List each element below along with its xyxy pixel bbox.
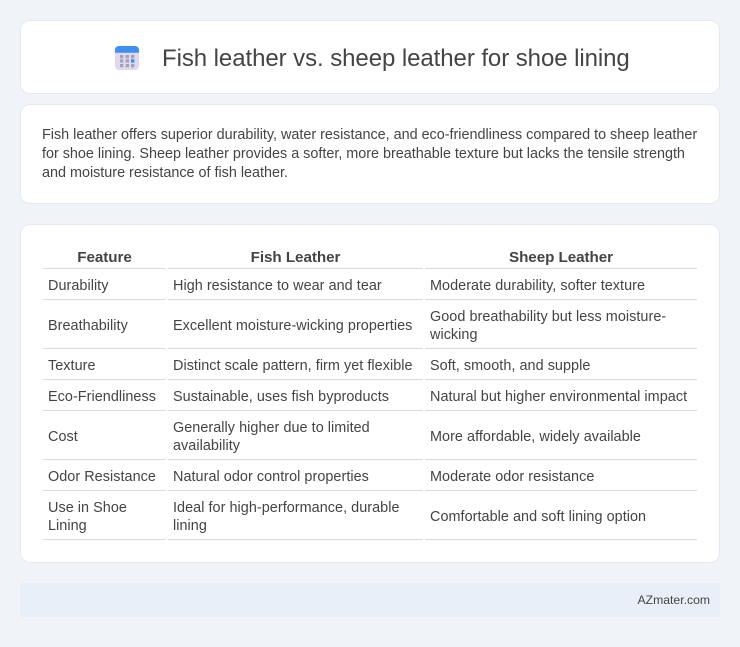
comparison table: Distinct scale pattern, firm yet flexible [173,358,413,374]
comparison table: Lining [48,518,87,534]
comparison table: Soft, smooth, and supple [430,358,590,374]
comparison table: lining [173,518,207,534]
intro text [42,127,697,181]
icon: calendar [115,46,139,70]
comparison table: Ideal for high-performance, durable [173,500,400,516]
comparison table: Natural but higher environmental impact [430,389,687,405]
comparison table: wicking [430,327,478,343]
comparison table: Sustainable, uses fish byproducts [173,389,389,405]
table card [20,224,720,563]
intro text: and moisture resistance of fish leather. [42,165,288,181]
comparison table: Moderate odor resistance [430,469,594,485]
header: Sheep Leather: Sheep Leather [509,249,613,266]
comparison table: Texture [48,358,96,374]
comparison table: High resistance to wear and tear [173,278,382,294]
intro card [20,104,720,204]
title card [20,20,720,94]
comparison table: More affordable, widely available [430,429,641,445]
intro text: Fish leather offers superior durability, water resistance, and eco-friendliness compared to sheep leather [42,127,697,143]
comparison table: Breathability [48,318,128,334]
comparison table: Odor Resistance [48,469,156,485]
comparison table: Excellent moisture-wicking properties [173,318,412,334]
intro text: for shoe lining. Sheep leather provides a softer, more breathable texture but lacks the tensile strength [42,146,685,162]
comparison table: Comfortable and soft lining option [430,509,646,525]
comparison table: Eco-Friendliness [48,389,156,405]
row: Durability: Durability [48,278,108,294]
footer text: AZmater.com [638,593,710,607]
header: Feature: Feature [77,249,132,266]
comparison table: Use in Shoe [48,500,127,516]
comparison table: Moderate durability, softer texture [430,278,645,294]
footer bar [20,583,720,617]
comparison table: Generally higher due to limited [173,420,370,436]
comparison table: Good breathability but less moisture- [430,309,666,325]
title: Fish leather vs. sheep leather for shoe lining [162,45,630,72]
header: Fish Leather: Fish Leather [251,249,340,266]
comparison table: Natural odor control properties [173,469,369,485]
comparison table: Cost [48,429,78,445]
comparison table: availability [173,438,240,454]
